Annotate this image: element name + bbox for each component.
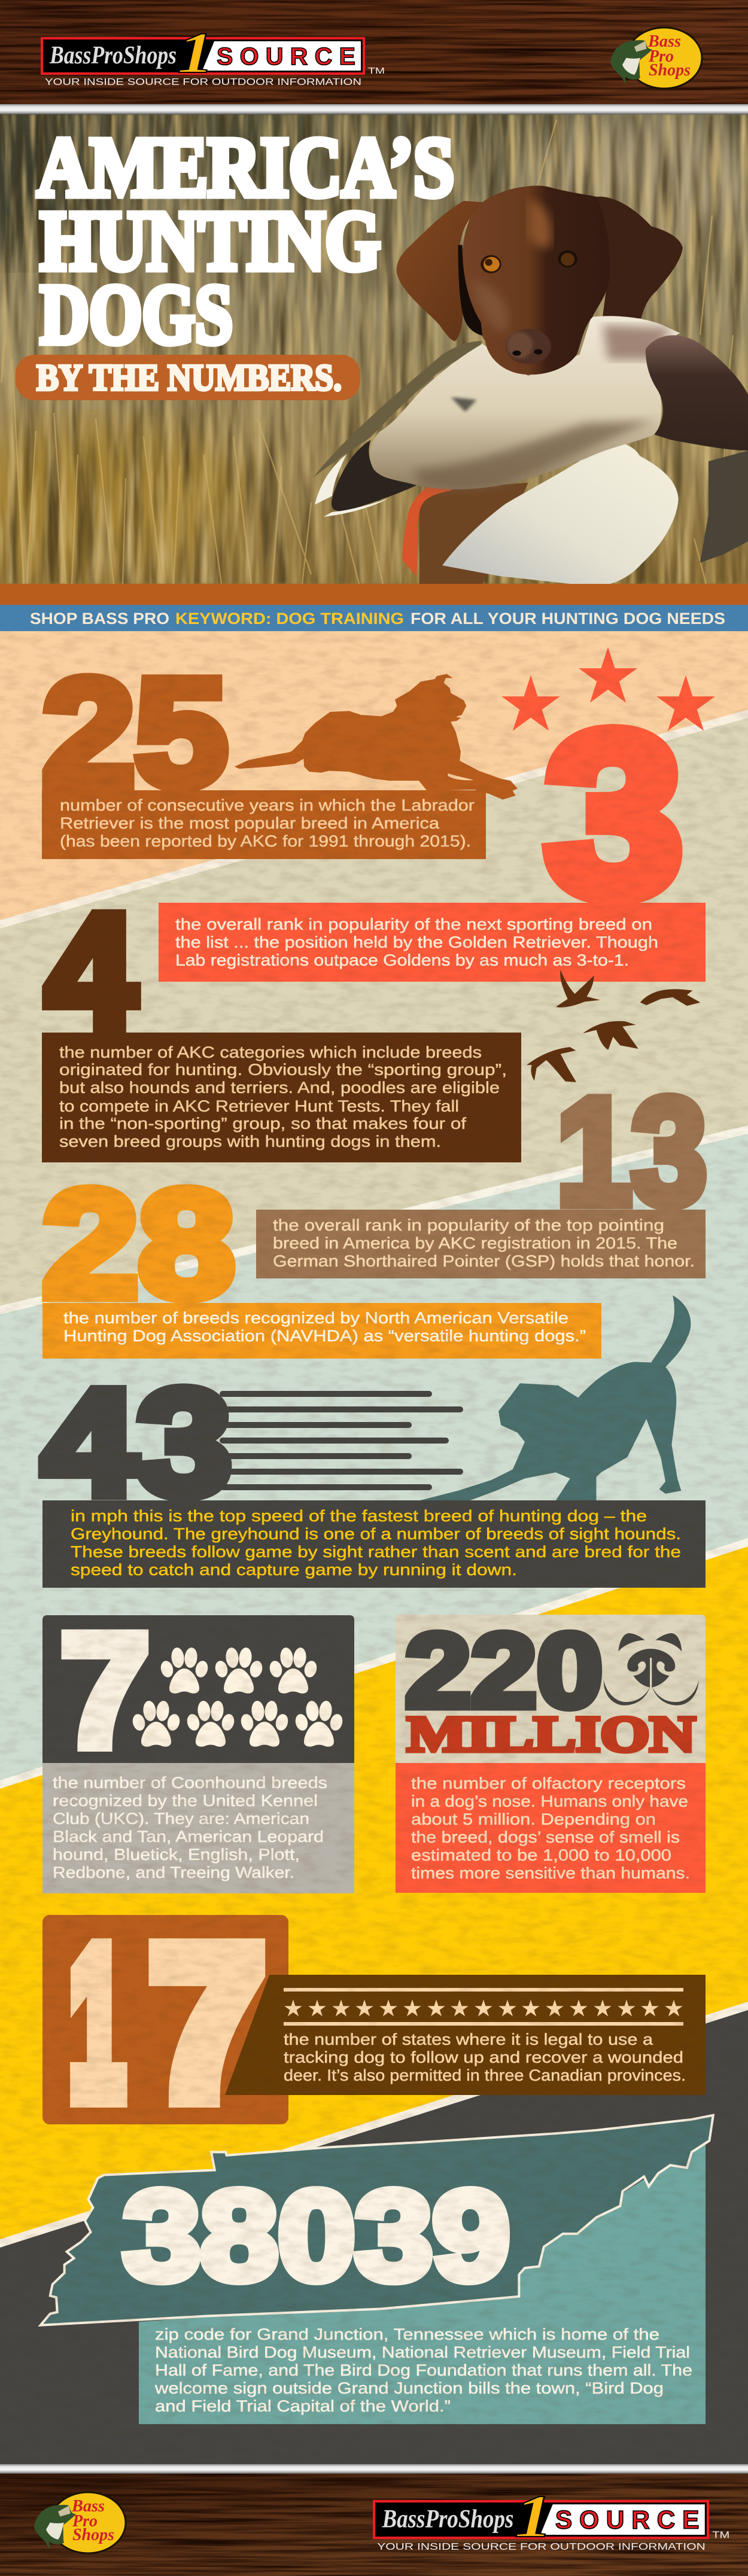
- teal text box: Hall of Fame, and The Bird Dog Foundation that runs them all. The: [155, 2361, 692, 2379]
- text box: hound, Bluetick, English, Plott,: [53, 1846, 300, 1864]
- text box: about 5 million. Depending on: [411, 1810, 656, 1828]
- number 25: 25: [42, 647, 227, 818]
- blue keyword banner: SHOP BASS PRO: [30, 610, 169, 628]
- icon: three stars: [501, 647, 715, 731]
- text box: in the “non-sporting” group, so that makes four of: [59, 1115, 467, 1132]
- text box: [42, 1303, 601, 1359]
- header logo: Bass Pro Shops 1 Source: TM: [368, 66, 385, 76]
- text box: the number of states where it is legal to use a: [284, 2030, 653, 2048]
- number 220: 220: [405, 1612, 603, 1729]
- footer logo: Bass Pro Shops 1 Source: YOUR INSIDE SOURCE FOR OUTDOOR INFORMATION: [377, 2541, 706, 2552]
- header logo: Bass Pro Shops 1 Source: 1: [177, 21, 214, 86]
- panel: 43: [42, 1295, 706, 1588]
- footer logo: Bass Pro Shops oval with fish: Shops: [72, 2526, 114, 2544]
- text box: number of consecutive years in which the Labrador: [60, 796, 475, 814]
- text box: the overall rank in popularity of the next sporting breed on: [175, 915, 652, 933]
- beige header: [396, 1615, 706, 1763]
- text box: Greyhound. The greyhound is one of a number of breeds of sight hounds.: [71, 1525, 681, 1543]
- header logo: Bass Pro Shops 1 Source: SOURCE: [217, 42, 355, 70]
- panel: 13: [256, 1067, 707, 1278]
- text box: Retriever is the most popular breed in America: [60, 814, 440, 832]
- number 17: 1: [69, 1904, 124, 2140]
- chrome divider: [0, 104, 748, 114]
- title: America's Hunting Dogs: AMERICA’S: [37, 120, 454, 214]
- number 38039: 38039: [123, 2164, 510, 2306]
- teal text box: welcome sign outside Grand Junction bills the town, “Bird Dog: [154, 2379, 664, 2397]
- header logo: Bass Pro Shops oval with fish: Bass: [647, 32, 681, 51]
- header logo: Bass Pro Shops 1 Source: YOUR INSIDE SOURCE FOR OUTDOOR INFORMATION: [45, 77, 361, 87]
- background: paper colour bands: [0, 631, 748, 2468]
- text box: German Shorthaired Pointer (GSP) holds that honor.: [273, 1252, 695, 1270]
- panel: 25: [42, 647, 518, 859]
- number 17: 7: [151, 1904, 263, 2140]
- panel: 17: [42, 1904, 706, 2140]
- text box: [256, 1210, 706, 1278]
- blue keyword banner: KEYWORD: DOG TRAINING: [175, 610, 404, 628]
- dark header: [42, 1615, 354, 1763]
- footer logo: Bass Pro Shops 1 Source: 1: [514, 2482, 553, 2550]
- number 43: 43: [42, 1359, 232, 1527]
- number 17: [69, 1904, 263, 2140]
- subtitle pill: By the Numbers: BY THE NUMBERS.: [37, 358, 342, 398]
- teal text box: zip code for Grand Junction, Tennessee which is home of the: [155, 2325, 659, 2343]
- icon: dog nose and muzzle: [604, 1633, 699, 1706]
- number 28: 28: [42, 1159, 235, 1329]
- text box: [159, 903, 706, 982]
- title: America's Hunting Dogs: HUNTING: [40, 193, 381, 288]
- footer chrome divider: [0, 2464, 748, 2474]
- text box: the breed, dogs’ sense of smell is: [411, 1828, 680, 1846]
- panel: 4: [42, 880, 700, 1162]
- text box: Lab registrations outpace Goldens by as much as 3-to-1.: [175, 951, 629, 969]
- text box: in a dog’s nose. Humans only have: [411, 1792, 688, 1810]
- text box: Black and Tan, American Leopard: [53, 1828, 324, 1846]
- number 4: 4: [45, 880, 137, 1062]
- teal text box: and Field Trial Capital of the World.”: [155, 2397, 451, 2415]
- header logo: Bass Pro Shops oval with fish: Pro: [648, 47, 674, 66]
- text box: Hunting Dog Association (NAVHDA) as “versatile hunting dogs.”: [63, 1327, 586, 1345]
- icon: flying ducks: [527, 970, 700, 1082]
- text box: recognized by the United Kennel: [53, 1792, 318, 1810]
- text box: [42, 1033, 521, 1162]
- footer logo: Bass Pro Shops 1 Source: [373, 2482, 729, 2552]
- text box: the number of AKC categories which include breeds: [59, 1043, 482, 1061]
- number 7: 7: [60, 1600, 150, 1780]
- text box: estimated to be 1,000 to 10,000: [411, 1846, 671, 1864]
- panel: 38039: [41, 2115, 713, 2424]
- text box: [42, 1500, 706, 1588]
- title: America's Hunting Dogs: [37, 120, 454, 361]
- text box: (has been reported by AKC for 1991 through 2015).: [60, 832, 471, 850]
- word MILLION: MILLION: [407, 1706, 695, 1762]
- header logo: Bass Pro Shops oval with fish: [610, 28, 702, 89]
- orange tile: [42, 1915, 288, 2124]
- text box: [396, 1763, 706, 1893]
- text box: to compete in AKC Retriever Hunt Tests. They fall: [59, 1097, 459, 1115]
- map: Tennessee outline: [41, 2115, 713, 2325]
- text box: [42, 790, 486, 859]
- text box: seven breed groups with hunting dogs in them.: [59, 1132, 441, 1150]
- footer logo: Bass Pro Shops oval with fish: Pro: [72, 2512, 98, 2531]
- teal text box: [139, 2142, 706, 2424]
- text box: the number of Coonhound breeds: [53, 1774, 327, 1792]
- text box: the overall rank in popularity of the top pointing: [273, 1216, 664, 1234]
- text box: but also hounds and terriers. And, poodles are eligible: [59, 1079, 500, 1097]
- text box: [42, 1763, 354, 1893]
- text box: breed in America by AKC registration in 2015. The: [273, 1234, 677, 1252]
- icon: lying labrador silhouette: [235, 674, 518, 800]
- icon: seven paw prints: [131, 1647, 344, 1747]
- hero photo: dog carrying a duck through tall grass: [0, 102, 748, 587]
- text box: Redbone, and Treeing Walker.: [53, 1864, 294, 1881]
- blue keyword banner: FOR ALL YOUR HUNTING DOG NEEDS: [411, 610, 725, 628]
- footer logo: Bass Pro Shops oval with fish: Bass: [71, 2497, 105, 2516]
- text box: the list ... the position held by the Golden Retriever. Though: [175, 933, 658, 951]
- panel: 28: [42, 1159, 601, 1359]
- text box: originated for hunting. Obviously the “sporting group”,: [59, 1061, 507, 1079]
- number 13: 13: [557, 1067, 707, 1236]
- text box: speed to catch and capture game by running it down.: [71, 1561, 517, 1579]
- icon: row of stars between rules: [284, 1988, 683, 2026]
- header logo: Bass Pro Shops 1 Source: [41, 21, 385, 87]
- footer logo: Bass Pro Shops oval with fish: [34, 2492, 126, 2553]
- brown strip: [0, 584, 748, 605]
- panel: 7: [42, 1600, 354, 1893]
- text box: Club (UKC). They are: American: [53, 1810, 309, 1828]
- panel: 3: [159, 647, 715, 982]
- number 3: 3: [546, 686, 682, 944]
- icon: speed lines: [220, 1391, 463, 1490]
- footer logo: Bass Pro Shops 1 Source: BassProShops: [382, 2505, 513, 2534]
- header logo: Bass Pro Shops 1 Source: BassProShops: [49, 42, 177, 69]
- text box: times more sensitive than humans.: [411, 1864, 690, 1882]
- text box: These breeds follow game by sight rather than scent and are bred for the: [71, 1543, 681, 1561]
- footer logo: Bass Pro Shops 1 Source: TM: [712, 2530, 729, 2540]
- text box: the number of olfactory receptors: [411, 1774, 686, 1792]
- footer wood panel: [0, 2474, 748, 2576]
- paper texture overlay: [0, 631, 748, 2464]
- icon: dog play-bow silhouette: [420, 1295, 691, 1500]
- panel: 220 million: [396, 1612, 706, 1893]
- text box: deer. It’s also permitted in three Canadian provinces.: [284, 2066, 686, 2084]
- footer logo: Bass Pro Shops 1 Source: SOURCE: [555, 2507, 699, 2535]
- text box: [225, 1975, 706, 2095]
- header logo: Bass Pro Shops oval with fish: Shops: [649, 61, 691, 80]
- teal text box: National Bird Dog Museum, National Retriever Museum, Field Trial: [155, 2343, 690, 2361]
- text box: in mph this is the top speed of the fastest breed of hunting dog – the: [71, 1507, 647, 1525]
- blue keyword banner: [0, 605, 748, 631]
- title: America's Hunting Dogs: DOGS: [40, 267, 233, 361]
- text box: the number of breeds recognized by North American Versatile: [63, 1309, 568, 1327]
- header wood panel: [0, 0, 748, 105]
- text box: tracking dog to follow up and recover a wounded: [284, 2048, 683, 2066]
